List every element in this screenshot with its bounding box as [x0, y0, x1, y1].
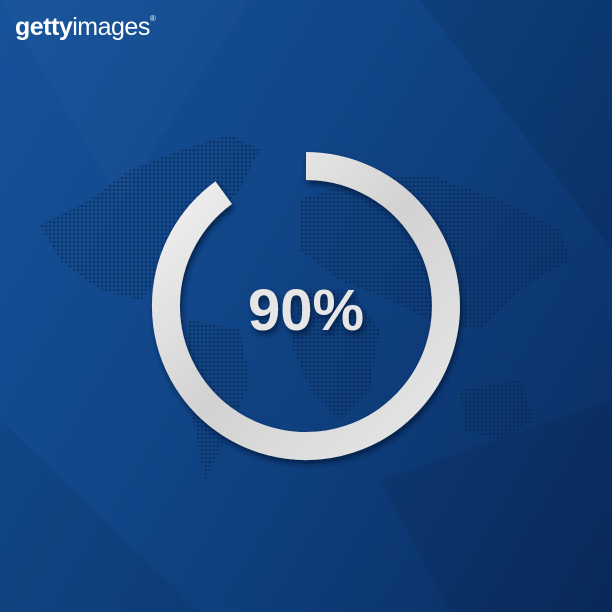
world map dotted: [40, 135, 570, 480]
percentage label: 90%: [248, 278, 364, 343]
logo: gettyimages®: [15, 13, 155, 41]
